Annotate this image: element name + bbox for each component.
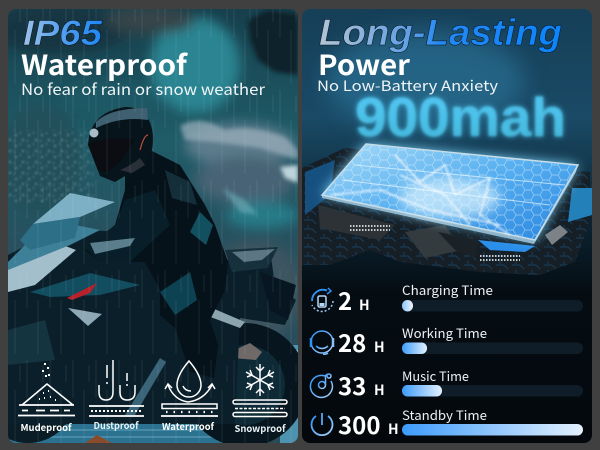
- label: Charging Time: Charging Time: [402, 280, 493, 299]
- value: 2 H: H: [359, 295, 370, 315]
- panel: battery: [302, 9, 592, 443]
- value: 2 H: 2: [338, 282, 352, 317]
- icon: mudeproof: [18, 364, 75, 416]
- bar: working: [402, 342, 583, 354]
- photo: motorcycle body: [8, 193, 296, 424]
- battery: [322, 144, 578, 244]
- rain overlay: [8, 9, 298, 443]
- value glow: 900mah: 900mah: [355, 86, 566, 148]
- photo: motorcycle wheels: [0, 323, 307, 447]
- value: 300 H: 300: [338, 406, 380, 441]
- icon: power: [312, 413, 332, 435]
- bar: standby: [402, 424, 583, 436]
- title: IP65: IP65: [23, 14, 103, 53]
- subheading: No Low-Battery Anxiety: [317, 75, 499, 96]
- photo: rainy forest background: [0, 6, 303, 443]
- value: 33 H: 33: [338, 367, 366, 402]
- label: Snowproof: Snowproof: [234, 421, 286, 435]
- panel: waterproof: [0, 6, 307, 447]
- heading: Waterproof: Waterproof: [21, 44, 189, 84]
- circuit board: [302, 148, 592, 275]
- value: 900mah: 900mah: [355, 86, 566, 148]
- bar: charging: [402, 300, 583, 312]
- heading: Power: Power: [318, 44, 411, 84]
- value: 33 H: H: [374, 380, 385, 400]
- bar: music: [402, 385, 583, 396]
- subheading: No fear of rain or snow weather: [21, 78, 266, 100]
- icon: charging: [312, 288, 333, 311]
- row: standby time: [312, 405, 583, 441]
- icon: snowproof: [233, 364, 287, 416]
- row: charging time: [312, 280, 583, 317]
- label: Music Time: Music Time: [402, 366, 469, 385]
- battery glow: [322, 144, 578, 240]
- icon: music: [310, 374, 332, 397]
- photo: ground and water: [8, 345, 298, 443]
- helmet: [88, 107, 153, 182]
- label: Standby Time: Standby Time: [402, 405, 487, 424]
- title: Long-Lasting: Long-Lasting: [319, 12, 562, 53]
- photo: rider: [85, 107, 228, 378]
- value: 28 H: H: [374, 337, 385, 357]
- label: Waterproof: Waterproof: [162, 419, 214, 433]
- icon: dustproof: [89, 360, 144, 416]
- label: Mudeproof: Mudeproof: [20, 420, 72, 434]
- label: Working Time: Working Time: [402, 323, 487, 342]
- row: music time: [310, 366, 583, 402]
- row: working time: [311, 323, 583, 359]
- value: 300 H: H: [388, 419, 399, 439]
- value: 28 H: 28: [338, 324, 366, 359]
- icon: waterproof: [161, 361, 218, 416]
- label: Dustproof: Dustproof: [94, 418, 139, 432]
- icon: headset: [311, 331, 333, 354]
